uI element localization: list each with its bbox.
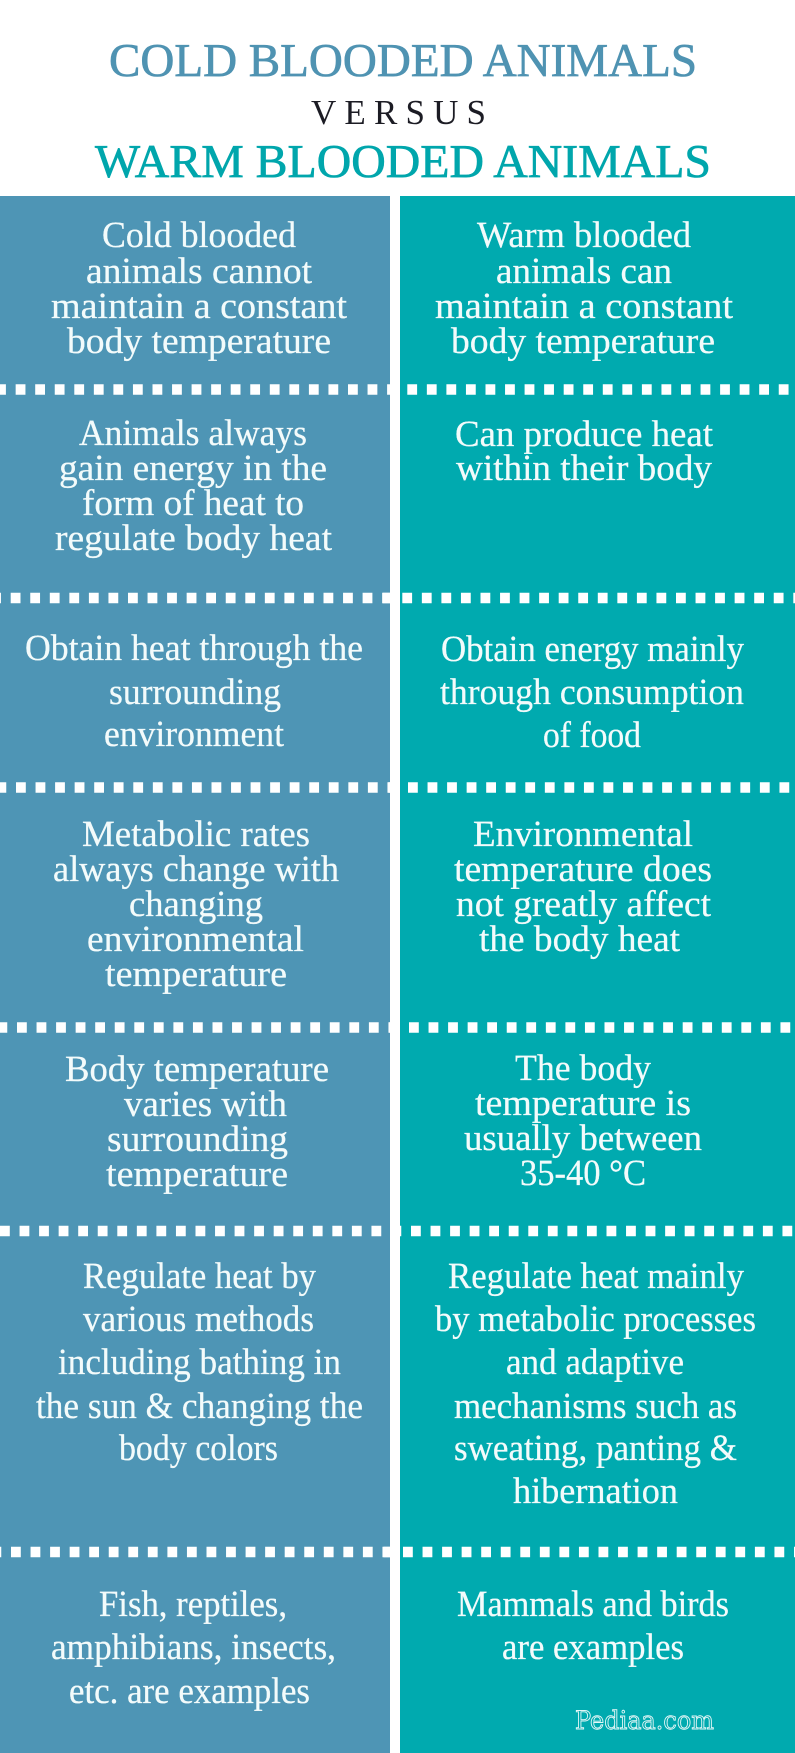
panel: cold blooded column: [0, 196, 390, 1753]
cold: heat source: Obtain heat through the: [25, 628, 363, 669]
panel: warm blooded column: [400, 196, 795, 1753]
warm: constant body temperature: maintain a constant: [435, 286, 734, 327]
cold: heat source: surrounding: [109, 672, 281, 713]
cold: constant body temperature: animals cannot: [86, 251, 313, 292]
title: [95, 35, 711, 188]
warm: heat production: [455, 414, 714, 489]
warm: constant body temperature: body temperature: [451, 321, 715, 362]
cold: heat regulation: Regulate heat by: [83, 1256, 316, 1297]
cold: heat regulation: body colors: [119, 1428, 278, 1469]
warm: environmental effect: temperature does: [454, 849, 712, 890]
warm: examples: [457, 1584, 729, 1668]
cold: heat regulation: including bathing in: [58, 1342, 341, 1383]
cold: body temperature range: surrounding: [107, 1119, 288, 1160]
cold: examples: [51, 1584, 336, 1712]
cold: body temperature range: temperature: [106, 1154, 288, 1195]
cold: metabolic rates: temperature: [105, 954, 287, 995]
brand: Pediaa.com: Pediaa.com: [575, 1706, 714, 1735]
cold: metabolic rates: environmental: [87, 919, 304, 960]
cold: examples: Fish, reptiles,: [99, 1584, 287, 1625]
warm: environmental effect: the body heat: [479, 919, 681, 960]
warm: environmental effect: [454, 814, 712, 960]
warm: energy source: [440, 629, 744, 756]
warm: heat production: within their body: [456, 448, 712, 489]
warm: constant body temperature: Warm blooded: [477, 215, 691, 256]
warm: heat regulation: sweating, panting &: [454, 1428, 737, 1469]
heading: versus: VERSUS: [311, 93, 486, 132]
cold: constant body temperature: body temperature: [67, 321, 331, 362]
cold: heat regulation: various methods: [83, 1299, 314, 1340]
cold: examples: etc. are examples: [69, 1671, 310, 1712]
warm: heat regulation: hibernation: [513, 1471, 678, 1512]
warm: energy source: through consumption: [440, 672, 744, 713]
heading: cold blooded animals: COLD BLOODED ANIMALS: [109, 35, 697, 87]
warm: body temperature range: temperature is: [475, 1083, 691, 1124]
cold: body temperature range: [65, 1049, 329, 1195]
warm: body temperature range: The body: [515, 1048, 651, 1089]
warm: heat regulation: by metabolic processes: [435, 1299, 756, 1340]
cold: metabolic rates: [53, 814, 339, 995]
cold: constant body temperature: [51, 215, 348, 362]
warm: heat regulation: and adaptive: [506, 1342, 684, 1383]
warm: constant body temperature: animals can: [496, 251, 672, 292]
cold: energy gain: regulate body heat: [55, 518, 333, 559]
warm: body temperature range: 35-40 °C: [520, 1153, 646, 1194]
warm: examples: are examples: [502, 1627, 684, 1668]
cold: heat source: [25, 628, 363, 755]
warm: body temperature range: [464, 1048, 702, 1194]
warm: heat regulation: Regulate heat mainly: [448, 1256, 744, 1297]
cold: body temperature range: varies with: [124, 1084, 287, 1125]
warm: energy source: Obtain energy mainly: [441, 629, 744, 670]
warm: heat regulation: mechanisms such as: [454, 1386, 737, 1427]
heading: warm blooded animals: WARM BLOODED ANIMALS: [95, 136, 711, 188]
warm: environmental effect: Environmental: [473, 814, 693, 855]
cold: examples: amphibians, insects,: [51, 1627, 336, 1668]
cold: constant body temperature: Cold blooded: [102, 215, 296, 256]
cold: metabolic rates: always change with: [53, 849, 339, 890]
cold: metabolic rates: changing: [129, 884, 263, 925]
warm: heat production: Can produce heat: [455, 414, 714, 455]
warm: body temperature range: usually between: [464, 1118, 702, 1159]
warm: environmental effect: not greatly affect: [456, 884, 712, 925]
cold: metabolic rates: Metabolic rates: [82, 814, 310, 855]
warm: energy source: of food: [543, 715, 641, 756]
warm: heat regulation: [435, 1256, 756, 1512]
cold: heat source: environment: [104, 714, 285, 755]
warm: examples: Mammals and birds: [457, 1584, 729, 1625]
cold: body temperature range: Body temperature: [65, 1049, 329, 1090]
cold: energy gain: Animals always: [79, 413, 307, 454]
cold: heat regulation: the sun & changing the: [36, 1386, 363, 1427]
cold: energy gain: form of heat to: [82, 483, 304, 524]
cold: energy gain: gain energy in the: [59, 448, 327, 489]
cold: constant body temperature: maintain a constant: [51, 286, 348, 327]
cold: energy gain: [55, 413, 333, 559]
cold: heat regulation: [36, 1256, 363, 1469]
warm: constant body temperature: [435, 215, 734, 362]
